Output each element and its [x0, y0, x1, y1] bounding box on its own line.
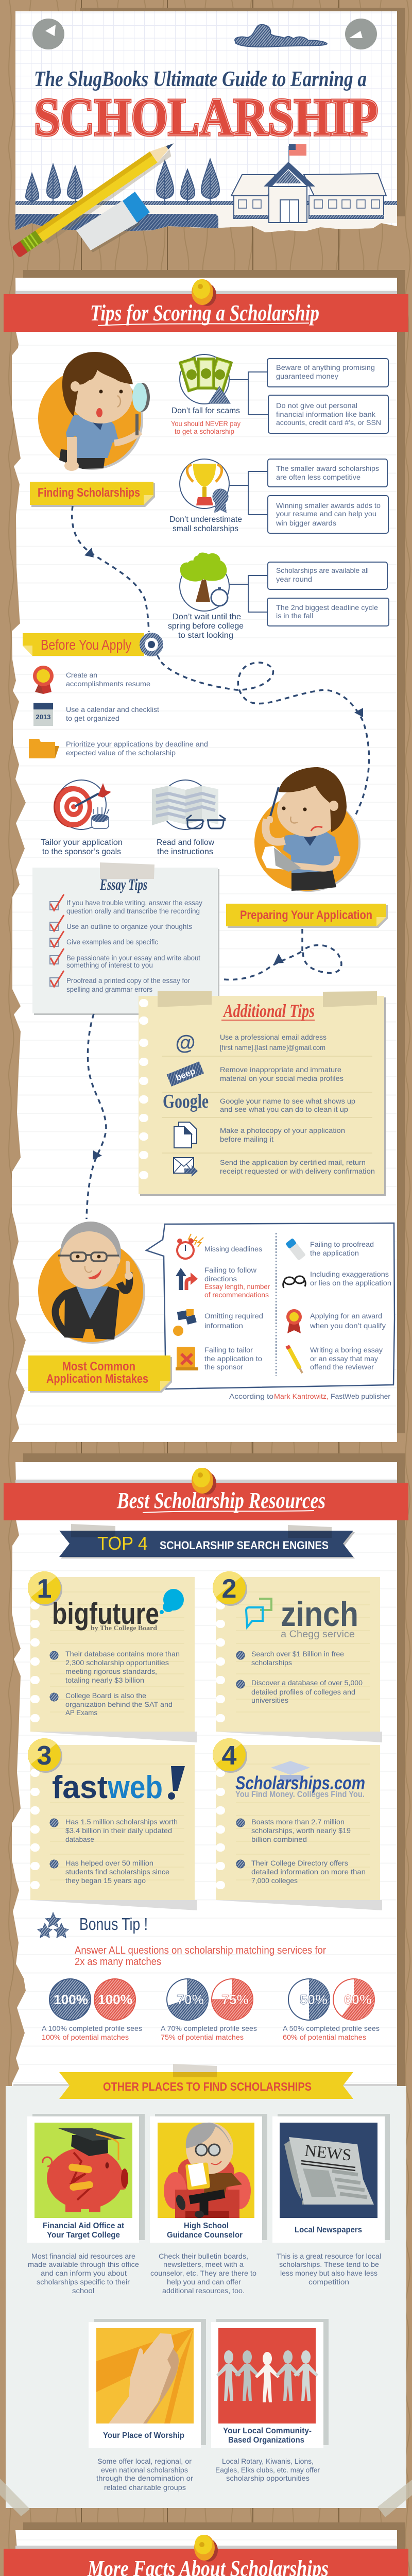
icon: torn scroll with x: [176, 1347, 198, 1370]
speech bubble: common mistakes: offend the reviewer: [310, 1363, 374, 1371]
banner: best scholarship resources: Best Scholarship Resources: [116, 1488, 325, 1513]
card 2: zinch: universities: [251, 1696, 288, 1704]
description: financial aid: Most financial aid resources are: [31, 2252, 135, 2260]
pencil: [12, 138, 180, 262]
panel: essay tips: question orally and transcribe the recording: [66, 907, 200, 915]
logo: bigfuture: bigfuture: [52, 1597, 159, 1631]
pie pair 100: 100%: [98, 1992, 132, 2007]
dashed route: before you apply to preparing: [161, 662, 369, 818]
panel: section 2 paper: [12, 1462, 397, 2088]
polaroid: community organizations: [211, 2319, 329, 2448]
pie charts: profile completion: [42, 1979, 380, 2041]
panel: additional tips: Make a photocopy of your application: [220, 1126, 345, 1134]
panel: additional tips: [first name].[last name]@gmail.com: [220, 1043, 325, 1052]
step: read instructions: Read and follow: [157, 838, 214, 847]
step: calendar: [33, 703, 159, 726]
illustration: piggy bank with cap: [43, 2128, 128, 2212]
attribution: Mark Kantrowitz,: [274, 1392, 329, 1400]
speech bubble: common mistakes: or an essay that may: [310, 1354, 378, 1363]
cream ground: [15, 205, 397, 232]
bonus tip text: [75, 1945, 326, 1968]
label: finding scholarships: Finding Scholarships: [38, 486, 140, 500]
tip: start early: Don’t wait until the: [173, 613, 241, 621]
polaroid: local newspapers: Local Newspapers: [295, 2226, 362, 2234]
icon: mask: [283, 1276, 305, 1288]
character: student with magnifier: [38, 352, 150, 471]
icon: photocopy documents: [174, 1122, 197, 1148]
note: guaranteed money: Beware of anything promising: [276, 363, 375, 371]
description: financial aid: and can inform you about: [41, 2269, 127, 2277]
speech bubble: common mistakes: the application to: [204, 1354, 262, 1363]
panel: additional tips: Google your name to see what shows up: [220, 1097, 355, 1105]
panel: essay tips: Proofread a printed copy of the essay for: [66, 976, 190, 985]
description: counselor: newsletters, meet with a: [163, 2260, 244, 2268]
panel: additional tips: Use a professional email address: [220, 1033, 327, 1041]
illustration: newspaper: [284, 2137, 374, 2205]
pie pair 100: [49, 1979, 135, 2020]
pie pair 70 and 75: 70%: [177, 1992, 204, 2007]
note: less competitive: are often less competitive: [276, 473, 360, 481]
icon: beep censor stamp: [167, 1061, 204, 1087]
note: guaranteed money: [267, 359, 388, 387]
description: counselor: [150, 2252, 256, 2295]
speech bubble: common mistakes: [146, 1223, 394, 1389]
badge 4: 4: [222, 1741, 237, 1771]
polaroid: financial aid office: [27, 2114, 145, 2243]
speech bubble: common mistakes: Missing deadlines: [204, 1245, 262, 1253]
description: worship: through the denomination or: [96, 2474, 193, 2482]
icon: yellow push pin: [192, 279, 216, 306]
panel: additional tips: receipt requested or with delivery confirmation: [220, 1167, 375, 1175]
illustration: newspaper: NEWS: [304, 2141, 352, 2164]
card 3: fastweb: Has 1.5 million scholarships worth: [65, 1818, 178, 1826]
binder hole right: [345, 19, 377, 49]
logo: scholarships.com: [235, 1761, 365, 1799]
step: accomplishments resume: Create an: [66, 671, 97, 679]
card 2: zinch: Search over $1 Billion in free: [251, 1650, 344, 1658]
note: personal information: Do not give out personal: [276, 401, 357, 410]
card 4: scholarships.com: Boasts more than 2.7 million: [251, 1818, 345, 1826]
panel: additional tips: and see what you can do to clean it up: [220, 1105, 348, 1113]
speech bubble: common mistakes: the sponsor: [204, 1363, 243, 1371]
speech bubble: common mistakes: Including exaggerations: [310, 1270, 389, 1278]
pie captions: [42, 2024, 380, 2041]
step: read instructions: the instructions: [157, 848, 213, 856]
pie captions: 75% of potential matches: [161, 2033, 244, 2041]
step: prioritize: [29, 739, 208, 758]
card 2: zinch: detailed profiles of colleges and: [251, 1688, 355, 1696]
label: before you apply: [23, 633, 144, 656]
icon: fan of money with warning: [179, 354, 233, 404]
panel: additional tips: [139, 991, 386, 1196]
connector: [229, 575, 267, 612]
connector: [229, 471, 268, 515]
tip: scams: [171, 354, 388, 435]
description: counselor: help you and can offer: [167, 2278, 241, 2286]
note: guaranteed money: guaranteed money: [276, 372, 338, 380]
card 3: fastweb: database: [65, 1835, 94, 1843]
logo: fastweb: [52, 1766, 185, 1805]
note: year round: year round: [276, 575, 312, 583]
note: year round: Scholarships are available all: [276, 566, 369, 574]
tip: small scholarships: Don’t underestimate: [169, 515, 242, 524]
panel: section 3 paper: [12, 2530, 397, 2576]
banner: tips for scoring: Tips for Scoring a Scholarship: [90, 300, 319, 326]
polaroid: place of worship: Your Place of Worship: [103, 2431, 184, 2440]
note: resume: win bigger awards: [276, 519, 336, 527]
card 1: bigfuture: College Board is also the: [65, 1691, 146, 1700]
card 1: bigfuture: organization behind the SAT and: [65, 1700, 173, 1708]
card 4: scholarships.com: detailed information on more than: [251, 1868, 366, 1876]
icon: direction arrows: [176, 1268, 198, 1290]
banner shadow: [15, 291, 397, 294]
character: professor: [38, 1222, 145, 1344]
step: tailor: Tailor your application: [41, 838, 123, 847]
panel: hero notebook paper: [15, 11, 397, 232]
note: deadline cycle: The 2nd biggest deadline cycle: [276, 603, 378, 612]
connector: [229, 372, 268, 415]
speech bubble: common mistakes: Omitting required: [204, 1312, 263, 1320]
dashed route: finding to before you apply: [72, 506, 149, 632]
step: read instructions: [152, 780, 226, 856]
icon: at sign: @: [175, 1031, 196, 1054]
logo: bigfuture: by The College Board: [91, 1624, 158, 1632]
panel: essay tips: If you have trouble writing, answer the essay: [66, 899, 202, 907]
speech bubble: common mistakes: Applying for an award: [310, 1312, 382, 1320]
logo: fastweb: fast: [52, 1770, 108, 1805]
note: resume: [268, 496, 388, 533]
label: preparing your application: [226, 904, 388, 928]
panel: additional tips: before mailing it: [220, 1135, 273, 1143]
trees: [26, 159, 219, 205]
description: financial aid: scholarships specific to their: [37, 2278, 130, 2286]
note: resume: Winning smaller awards adds to: [276, 501, 381, 510]
binder hole left: [32, 19, 64, 49]
checkbox ticks: [50, 894, 64, 987]
attribution: [229, 1392, 390, 1400]
panel: essay tips: [32, 862, 219, 1015]
arrow head: [93, 1150, 102, 1160]
icon: three stars: [38, 1912, 68, 1938]
card 3: fastweb: Has helped over 50 million: [65, 1859, 153, 1867]
tip: scams: You should NEVER pay: [171, 419, 241, 428]
card 2: zinch: scholarships: [251, 1658, 292, 1667]
ribbon heading: [59, 2064, 353, 2099]
speech bubble: common mistakes: Writing a boring essay: [310, 1346, 383, 1354]
description: community: scholarship opportunities: [226, 2474, 310, 2482]
banner: best scholarship resources: [4, 1483, 408, 1520]
banner shadow: [15, 2546, 397, 2549]
description: newspapers: scholarships. These tend to be: [279, 2260, 379, 2268]
badge 3: 3: [37, 1741, 52, 1771]
speech bubble: common mistakes: Essay length, number: [204, 1282, 270, 1291]
icon: eraser: [285, 1238, 306, 1261]
icon: folded map and glasses: [152, 780, 226, 829]
cloud sketch: [235, 25, 327, 47]
bonus tip heading: Bonus Tip !: [79, 1914, 148, 1934]
description: newspapers: [277, 2252, 381, 2286]
bonus tip text: Answer ALL questions on scholarship matching services for: [75, 1945, 326, 1956]
banner: more facts: [4, 2549, 408, 2576]
polaroid: financial aid office: Financial Aid Office at: [43, 2222, 125, 2230]
illustration: praying hands: [96, 2328, 194, 2424]
badge 3: [28, 1738, 62, 1773]
banner shadow: [15, 1480, 397, 1483]
logo: zinch: a Chegg service: [281, 1629, 355, 1640]
icon: trophy and rosette: [180, 459, 229, 513]
torn binder notches: [139, 999, 148, 1179]
card 3: fastweb: they began 15 years ago: [65, 1876, 146, 1885]
icon: ribbon: [33, 666, 54, 694]
logo: scholarships.com: You Find Money. Colleges Find You.: [235, 1789, 365, 1799]
bonus tip heading: [38, 1912, 148, 1938]
label: most common application mistakes: Application Mistakes: [46, 1372, 148, 1386]
speech bubble: common mistakes: Failing to proofread: [310, 1240, 374, 1248]
card 1: bigfuture: 2,300 scholarship opportunities: [65, 1658, 169, 1667]
description: worship: related charitable groups: [104, 2483, 186, 2492]
character: student with pencil and paper: [254, 767, 360, 892]
description: community: Local Rotary, Kiwanis, Lions,: [222, 2457, 314, 2465]
icon: calendar: [33, 703, 53, 726]
note: resume: your resume and can help you: [276, 510, 376, 518]
pie captions: A 50% completed profile sees: [283, 2024, 380, 2032]
panel: essay tips: Essay Tips: [99, 875, 147, 893]
polaroid: financial aid office: Your Target College: [47, 2231, 120, 2240]
description: counselor: Check their bulletin boards,: [159, 2252, 248, 2260]
icon: pencil: [287, 1346, 302, 1373]
ribbon heading: OTHER PLACES TO FIND SCHOLARSHIPS: [103, 2080, 312, 2093]
note: personal information: accounts, credit card #’s, or SSN: [276, 418, 381, 427]
note: less competitive: [268, 459, 387, 487]
bullets: [236, 1651, 245, 1688]
ribbon: top 4 search engines: [59, 1524, 355, 1558]
pie pair 100: 100%: [54, 1992, 88, 2007]
description: community: Eagles, Elks clubs, etc. may offer: [215, 2466, 320, 2474]
label: before you apply: Before You Apply: [41, 637, 131, 653]
step: tailor: [41, 780, 123, 856]
icon: yellow push pin: [194, 2535, 218, 2562]
card 1: bigfuture: AP Exams: [65, 1708, 97, 1717]
badge 2: [213, 1571, 247, 1606]
dashed route: preparing to additional tips: [220, 929, 341, 980]
label: finding scholarships: [30, 482, 155, 507]
pie pair 50 and 60: [288, 1979, 374, 2020]
card 3: fastweb: [28, 1738, 197, 1910]
polaroid: guidance counselor: [150, 2114, 267, 2243]
description: worship: even national scholarships: [101, 2466, 188, 2474]
note: personal information: [268, 395, 388, 433]
panel: section 1 paper: [12, 278, 397, 1442]
label: most common application mistakes: Most Common: [62, 1360, 135, 1374]
arrow head: [84, 548, 94, 557]
description: newspapers: This is a great resource for local: [277, 2252, 381, 2260]
polaroid: community organizations: Based Organizations: [228, 2436, 304, 2445]
paper flap left: [45, 25, 56, 36]
tip: start early: to start looking: [178, 631, 233, 640]
card 4: scholarships.com: 7,000 colleges: [251, 1876, 298, 1885]
speech bubble: common mistakes: Failing to follow: [204, 1266, 257, 1274]
note: personal information: financial information like bank: [276, 410, 376, 418]
logo: zinch: zinch: [281, 1595, 358, 1634]
corner tape left: [0, 2479, 30, 2516]
speech bubble: common mistakes: when you don’t qualify: [310, 1321, 386, 1330]
tip: scams: Don’t fall for scams: [171, 406, 240, 415]
banner: tips for scoring: [4, 294, 408, 332]
corner tape right: [377, 2480, 412, 2517]
ribbon: top 4 search engines: TOP 4: [97, 1533, 148, 1554]
card 4: scholarships.com: [213, 1738, 382, 1910]
panel: other places to find scholarships: [0, 2064, 412, 2517]
badge 1: [28, 1571, 62, 1606]
card 1: bigfuture: totaling nearly $3 billion: [65, 1676, 144, 1684]
note: deadline cycle: [267, 598, 389, 626]
icon: tree and stopwatch: [180, 552, 229, 611]
step: calendar: Use a calendar and checklist: [66, 705, 159, 714]
pie pair 70 and 75: 75%: [221, 1992, 249, 2007]
speech bubble: common mistakes: information: [204, 1321, 243, 1330]
speech bubble: common mistakes: or lies on the application: [310, 1279, 391, 1287]
description: worship: Some offer local, regional, or: [97, 2457, 192, 2465]
icon: yellow push pin: [192, 1468, 216, 1495]
step: tailor: to the sponsor’s goals: [42, 848, 121, 856]
speech bubble: common mistakes: Failing to tailor: [204, 1346, 253, 1354]
polaroid: guidance counselor: High School: [184, 2222, 229, 2230]
card 1: bigfuture: [28, 1571, 197, 1742]
step: calendar: to get organized: [66, 714, 119, 722]
note: less competitive: The smaller award scholarships: [276, 464, 379, 472]
tip: small scholarships: [169, 459, 388, 533]
icon: calendar: 2013: [36, 713, 50, 721]
polaroid: community organizations: Your Local Community-: [223, 2427, 312, 2435]
polaroid: guidance counselor: Guidance Counselor: [167, 2231, 243, 2240]
icon: award ribbon: [286, 1309, 302, 1333]
panel: additional tips: Send the application by certified mail, return: [220, 1158, 366, 1166]
dashed route: essay tips to mistakes: [87, 1014, 106, 1219]
icon: puzzle pieces: [173, 1309, 197, 1336]
pie pair 50 and 60: 60%: [344, 1992, 372, 2007]
step: prioritize: expected value of the scholarship: [66, 749, 176, 757]
card 2: zinch: Discover a database of over 5,000: [251, 1679, 363, 1687]
ribbon: top 4 search engines: SCHOLARSHIP SEARCH ENGINES: [160, 1539, 329, 1552]
card 4: scholarships.com: Their College Directory offers: [251, 1859, 348, 1867]
panel: essay tips: spelling and grammar errors: [66, 985, 152, 993]
icon: target and dart: [54, 780, 111, 829]
arrow head: [274, 954, 284, 963]
bonus tip text: 2x as many matches: [75, 1956, 161, 1968]
icon: beep censor stamp: beep: [174, 1066, 197, 1083]
hatched road: [15, 214, 218, 231]
badge 4: [213, 1738, 247, 1773]
label: most common application mistakes: [28, 1355, 172, 1393]
schoolhouse: [231, 146, 386, 223]
pie captions: 60% of potential matches: [283, 2033, 366, 2041]
card 1: bigfuture: Their database contains more than: [65, 1650, 180, 1658]
panel: essay tips: Give examples and be specific: [66, 938, 158, 946]
description: financial aid: [28, 2252, 139, 2295]
arrow head: [354, 708, 363, 717]
polaroid: place of worship: [89, 2319, 206, 2448]
pie captions: A 70% completed profile sees: [161, 2024, 257, 2032]
panel: additional tips: Additional Tips: [222, 1001, 315, 1021]
pie captions: 100% of potential matches: [42, 2033, 129, 2041]
bullets: [50, 1819, 58, 1868]
description: counselor: counselor, etc. They are there to: [150, 2269, 256, 2277]
description: counselor: additional resources, too.: [162, 2286, 245, 2295]
description: community: [215, 2457, 320, 2482]
note: year round: [268, 562, 387, 589]
icon: folder: [29, 739, 59, 758]
polaroid: local newspapers: [272, 2114, 390, 2243]
plank seams: [81, 0, 339, 2576]
flag: [289, 144, 306, 156]
eraser: [76, 192, 150, 252]
description: newspapers: less money but also have less: [280, 2269, 377, 2277]
speech bubble: common mistakes: of recommendations: [204, 1291, 269, 1299]
panel: additional tips: Remove inappropriate and immature: [220, 1065, 341, 1074]
badge 2: 2: [222, 1574, 236, 1604]
attribution: According to: [229, 1392, 273, 1400]
bullets: [236, 1819, 245, 1868]
pie captions: A 100% completed profile sees: [42, 2024, 142, 2032]
tape pieces: [158, 991, 377, 1007]
icon: google wordmark: Google: [163, 1091, 209, 1112]
attribution: FastWeb publisher: [331, 1392, 390, 1400]
icon: envelope with arrow: [174, 1158, 198, 1177]
illustration: counselor in armchair: [164, 2123, 251, 2218]
card 3: fastweb: $3.4 billion in their daily updated: [65, 1826, 172, 1835]
tip: start early: [168, 552, 389, 640]
step: accomplishments resume: [33, 666, 150, 694]
card 1: bigfuture: meeting rigorous standards,: [65, 1667, 157, 1675]
speech bubble: common mistakes: directions: [204, 1275, 237, 1283]
pie pair 70 and 75: [167, 1979, 253, 2020]
panel: essay tips: Be passionate in your essay and write about: [66, 954, 200, 962]
ground hatch band: [15, 201, 397, 205]
description: worship: [96, 2457, 193, 2492]
paper flap right: [349, 31, 363, 38]
step: accomplishments resume: accomplishments resume: [66, 680, 150, 688]
panel: additional tips: material on your social media profiles: [220, 1074, 344, 1082]
icon: alarm clock: [177, 1234, 203, 1259]
description: financial aid: made available through this office: [28, 2260, 139, 2268]
icon: location pin: [140, 633, 163, 659]
description: financial aid: school: [72, 2286, 94, 2295]
pie pair 50 and 60: 50%: [300, 1992, 328, 2007]
card 4: scholarships.com: scholarships, worth nearly $19: [251, 1826, 351, 1835]
badge 1: 1: [37, 1574, 52, 1604]
card 2: zinch: [213, 1571, 382, 1742]
note: deadline cycle: is in the fall: [276, 612, 313, 620]
card 3: fastweb: students find scholarships since: [65, 1868, 169, 1876]
logo: fastweb: web: [107, 1770, 163, 1805]
logo: zinch: [246, 1595, 358, 1640]
panel: essay tips: Use an outline to organize your thoughts: [66, 922, 192, 930]
description: newspapers: competition: [308, 2278, 349, 2286]
illustration: paper people: [216, 2350, 318, 2402]
tip: small scholarships: small scholarships: [173, 524, 238, 533]
label: preparing your application: Preparing Your Application: [240, 908, 372, 922]
logo: scholarships.com: Scholarships.com: [235, 1772, 365, 1793]
tip: scams: to get a scholarship: [175, 427, 234, 435]
bullets: [50, 1651, 58, 1701]
tip: start early: spring before college: [168, 622, 244, 631]
speech bubble: common mistakes: the application: [310, 1249, 359, 1257]
card 4: scholarships.com: billion combined: [251, 1835, 307, 1843]
step: prioritize: Prioritize your applications by deadline and: [66, 740, 208, 748]
panel: essay tips: something of interest to you: [66, 961, 153, 969]
